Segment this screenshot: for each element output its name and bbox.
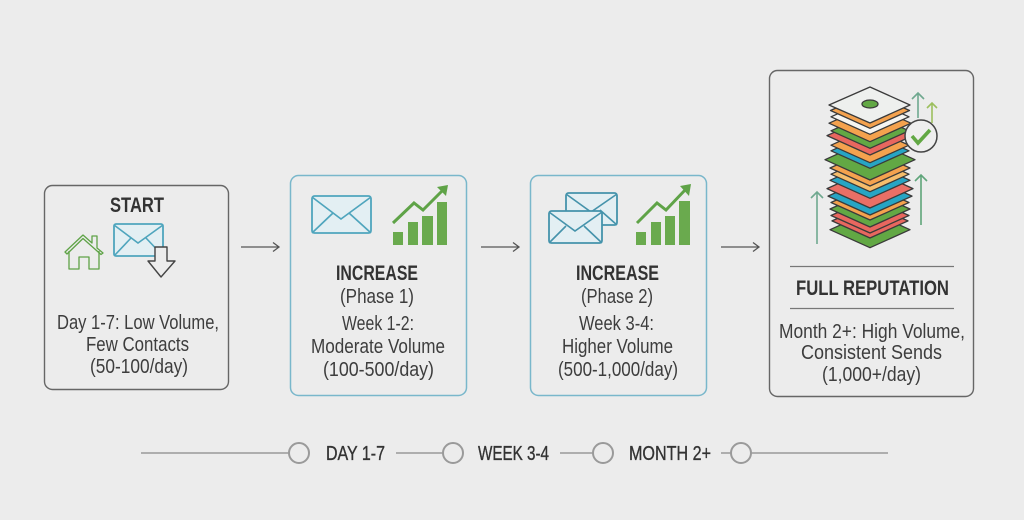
heading: increase phase 2 <box>576 262 659 308</box>
icon: growth chart <box>636 184 691 245</box>
timeline marker: end <box>731 443 751 463</box>
icon: check badge <box>905 120 937 152</box>
icon: envelope <box>312 196 371 233</box>
panel: start <box>44 186 228 390</box>
icon: layered stack <box>825 87 915 248</box>
timeline <box>141 443 888 465</box>
text: start details: (50-100/day) <box>90 356 188 378</box>
timeline marker: day 1-7 <box>289 443 309 463</box>
timeline marker: month 2 <box>593 443 613 463</box>
heading: full reputation: FULL REPUTATION <box>796 277 949 300</box>
text: full reputation details: Month 2+: High Volume, <box>779 321 965 343</box>
text: phase 2 details: Higher Volume <box>562 336 673 358</box>
text: phase 2 details: Week 3-4: <box>579 313 654 335</box>
arrow: phase 1 to phase 2 <box>481 242 519 252</box>
text: phase 1 details: Week 1-2: <box>342 313 414 335</box>
text: start details: Few Contacts <box>86 334 189 356</box>
heading: increase phase 1 <box>336 262 418 308</box>
heading: increase phase 1: (Phase 1) <box>340 286 414 308</box>
heading: full reputation <box>790 266 954 308</box>
text: full reputation details <box>779 321 965 386</box>
text: phase 1 details: Moderate Volume <box>311 336 445 358</box>
panel: increase phase 2 <box>530 176 706 396</box>
text: phase 2 details <box>558 313 678 381</box>
heading: increase phase 2: INCREASE <box>576 262 659 285</box>
text: start details: Day 1-7: Low Volume, <box>57 312 219 334</box>
icon: green up arrows <box>811 93 937 244</box>
panel: full reputation <box>770 70 974 396</box>
arrow: start to phase 1 <box>241 242 279 252</box>
heading: increase phase 2: (Phase 2) <box>581 286 653 308</box>
text: phase 1 details: (100-500/day) <box>323 359 434 381</box>
icon: envelope with down arrow <box>114 224 175 277</box>
timeline label: month 2+: MONTH 2+ <box>629 443 711 465</box>
heading: increase phase 1: INCREASE <box>336 262 418 285</box>
text: full reputation details: (1,000+/day) <box>822 364 921 386</box>
timeline label: day 1-7: DAY 1-7 <box>326 443 385 465</box>
text: phase 2 details: (500-1,000/day) <box>558 359 678 381</box>
timeline label: week 3-4: WEEK 3-4 <box>478 443 549 465</box>
text: full reputation details: Consistent Sends <box>801 342 942 364</box>
timeline marker: week 3-4 <box>443 443 463 463</box>
text: phase 1 details <box>311 313 445 381</box>
text: start details <box>57 312 219 378</box>
icon: house <box>65 235 103 269</box>
heading: start: START <box>110 194 164 217</box>
icon: growth chart <box>393 185 448 245</box>
arrow: phase 2 to full reputation <box>721 242 759 252</box>
panel: increase phase 1 <box>290 176 466 396</box>
icon: two envelopes <box>549 193 617 243</box>
